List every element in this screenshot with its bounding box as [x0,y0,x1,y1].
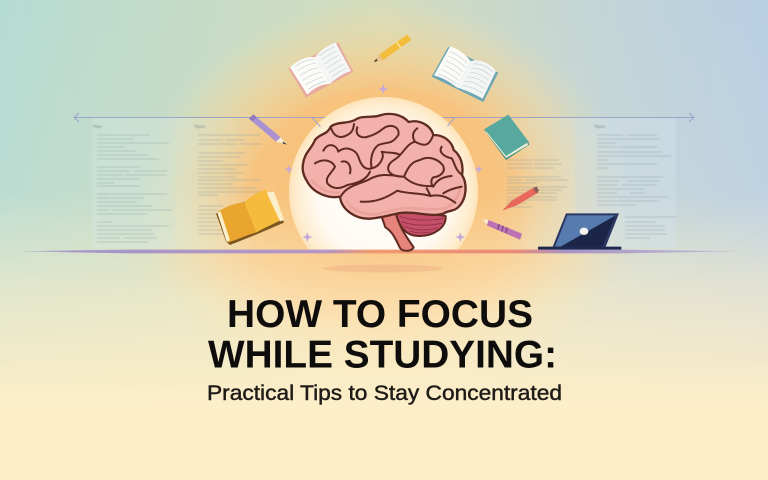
document panel: right page two [575,118,677,248]
document panel: left page one: Plan [93,124,103,129]
icon: purple crayon [483,219,522,240]
icon: teal closed book [484,115,529,160]
glowing disc behind brain [289,97,478,250]
icon: laptop [538,213,621,250]
subtitle: Practical Tips to Stay Concentrated [207,382,562,405]
timeline arrow across the documents [74,113,694,122]
connector lines to brain [270,118,500,127]
icon: open book teal [432,47,498,102]
icon: red pencil [502,186,539,211]
icon: brain [303,114,466,251]
title [208,293,557,376]
floor shadow [323,264,443,272]
document panel: left page two [175,118,262,248]
brain shading [312,180,460,215]
floor line [15,250,740,253]
sparkle stars [284,84,483,242]
brain folds [315,124,462,203]
document panel: right page two: Tipos [594,124,606,129]
icon: open book pink [288,43,353,98]
document panel: left page two: Tipos [194,124,206,129]
cerebellum [396,212,446,236]
document panel: right page one [495,118,575,248]
cerebrum [303,114,466,219]
icon: purple pencil [249,114,287,145]
brain stem [382,213,414,251]
title line two: WHILE STUDYING: [208,334,557,376]
icon: yellow pencil [374,34,411,62]
background gradient [0,0,768,374]
icon: yellow open book [216,189,284,245]
document panel: left page one [92,118,175,248]
title line one: HOW TO FOCUS [227,293,533,336]
